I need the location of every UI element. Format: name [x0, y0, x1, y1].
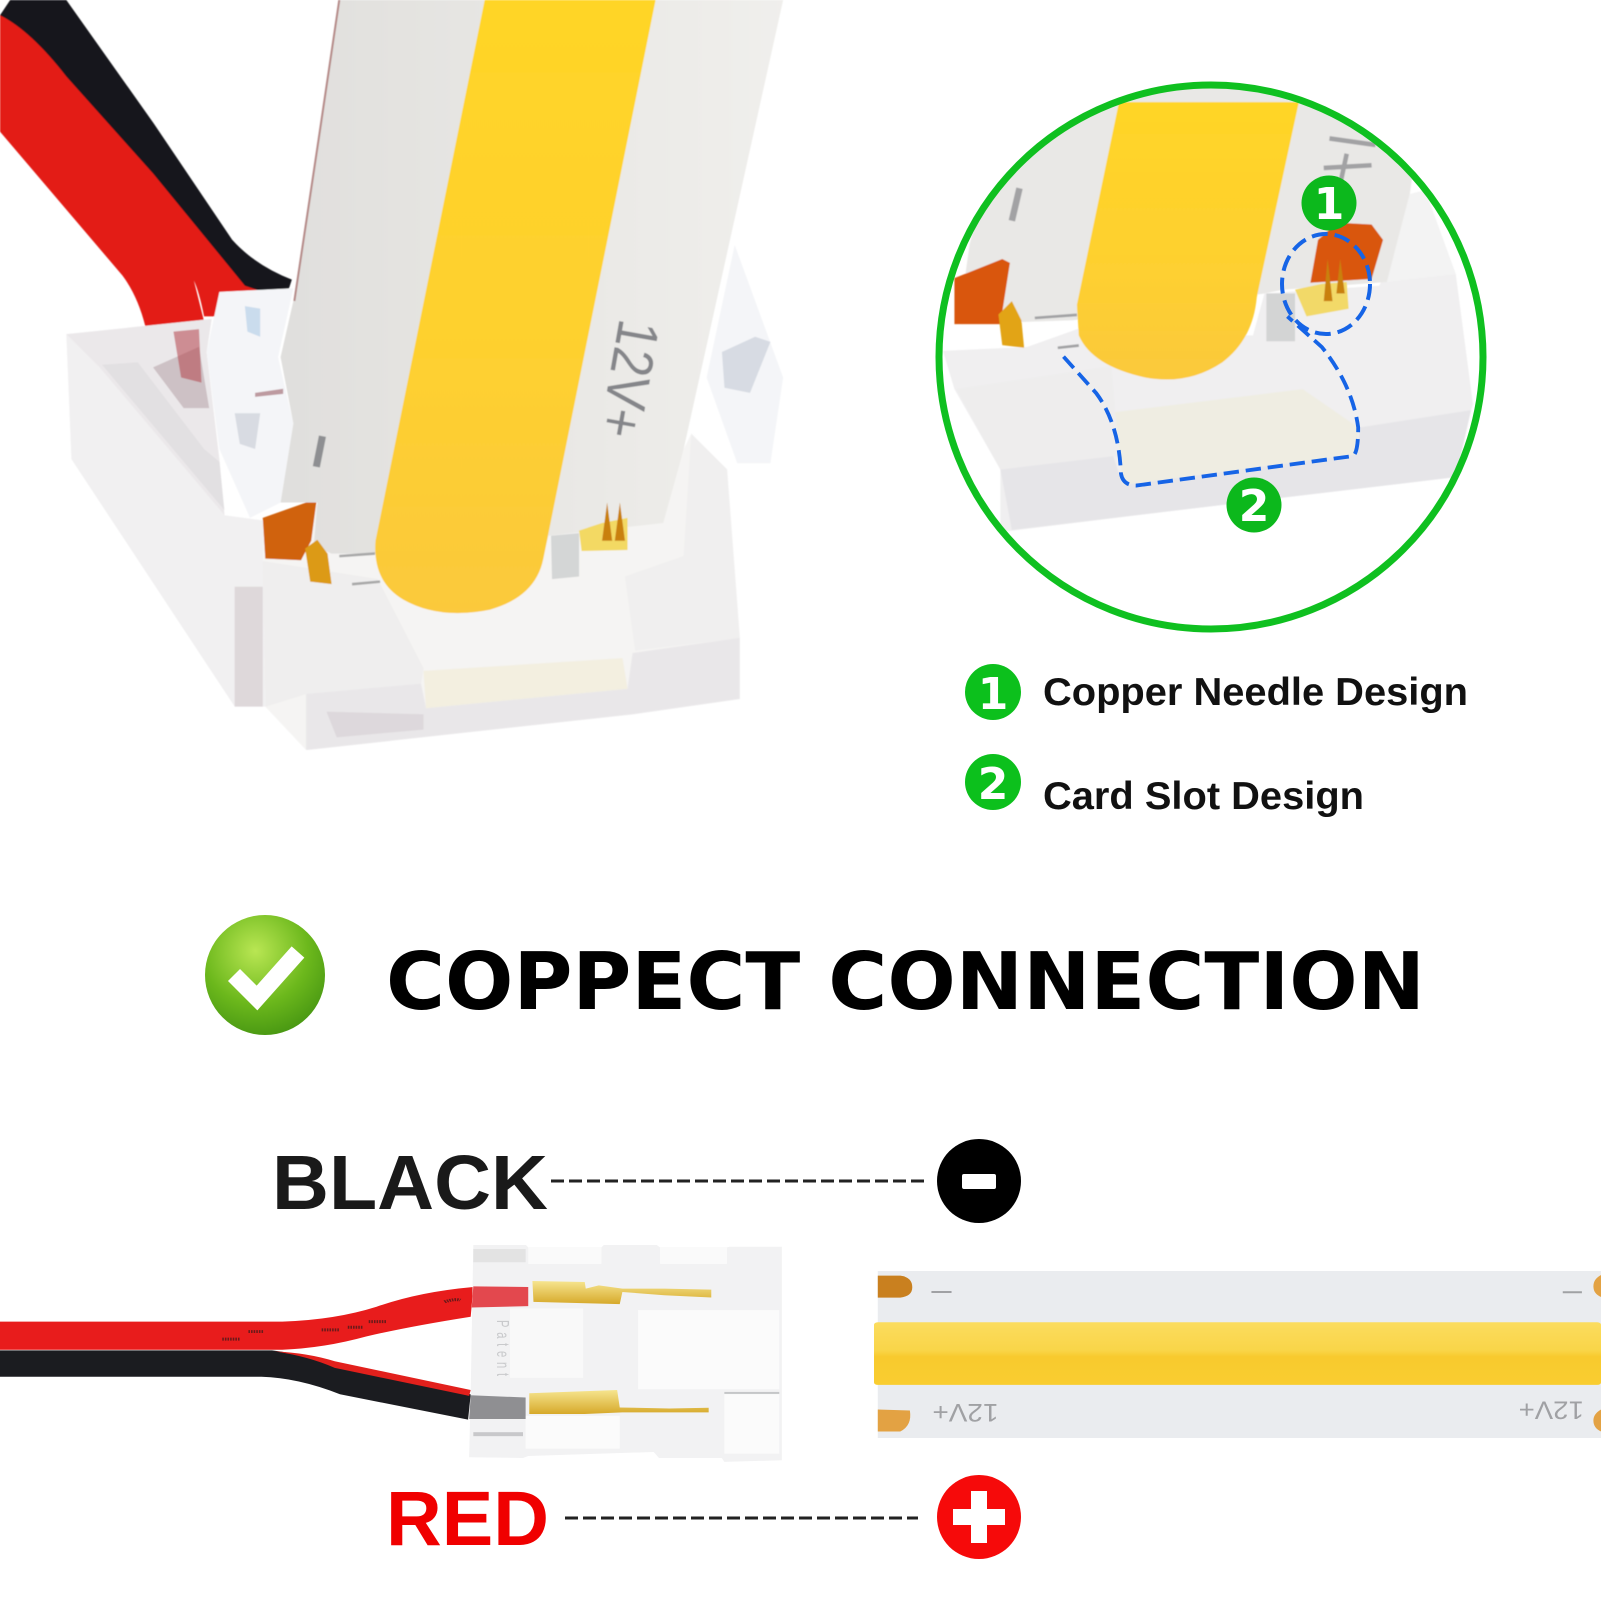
circle outline	[939, 85, 1483, 629]
label: black: BLACK	[272, 1140, 548, 1226]
dashed leader: red	[565, 1516, 918, 1520]
icon: plus	[937, 1475, 1021, 1559]
embossed mark: Patent	[492, 1320, 511, 1377]
wire: black with red stripe	[0, 1350, 471, 1420]
label: red: RED	[386, 1476, 549, 1562]
legend: copper needle design: 1	[978, 669, 1008, 720]
magnified photo	[943, 83, 1473, 531]
connector body	[469, 1245, 782, 1462]
legend: card slot design	[965, 754, 1364, 818]
text: 12V+ left: 12V+	[932, 1398, 998, 1426]
badge 1: 1	[1314, 179, 1344, 230]
dashed leader: black	[551, 1180, 928, 1182]
copper pads	[878, 1275, 1601, 1431]
legend: copper needle design	[965, 664, 1468, 720]
copper pads	[263, 469, 656, 560]
text: 12V+ right: 12V+	[1519, 1396, 1584, 1424]
icon: green check	[205, 915, 325, 1035]
legend: copper needle design: Copper Needle Design	[1043, 671, 1468, 714]
clip: left latch	[207, 288, 293, 518]
text: 12V+: 12V+	[587, 315, 671, 443]
connector: left body	[66, 319, 265, 707]
connector: front body	[263, 434, 740, 750]
photo: LED strip	[874, 1271, 1601, 1438]
polarity marks	[931, 1289, 1582, 1295]
badge 1	[1302, 176, 1356, 230]
wire: red	[0, 15, 276, 327]
LED strip yellow	[874, 1322, 1601, 1385]
wire: black	[0, 0, 292, 298]
contact pin: bottom	[529, 1390, 709, 1414]
heading: COPPECT CONNECTION	[386, 936, 1425, 1028]
clip: right latch	[707, 245, 783, 463]
dashed outline: needle area	[1282, 234, 1370, 334]
legend: card slot design: 2	[978, 759, 1008, 810]
wire: red	[0, 1287, 473, 1350]
contact pin: top	[532, 1281, 711, 1304]
legend: card slot design: Card Slot Design	[1043, 775, 1364, 818]
copper needles	[305, 503, 628, 584]
panel: magnified circle	[939, 83, 1483, 629]
photo: connector with wires	[0, 1245, 782, 1462]
photo: connector with strip inserted	[0, 0, 783, 750]
strip board	[878, 1271, 1601, 1438]
dashed outline: card slot	[1064, 316, 1358, 486]
strip	[281, 0, 783, 584]
LED strip yellow	[375, 0, 656, 613]
badge 2	[1226, 478, 1282, 532]
badge 2: 2	[1239, 481, 1269, 532]
icon: minus	[937, 1139, 1021, 1223]
